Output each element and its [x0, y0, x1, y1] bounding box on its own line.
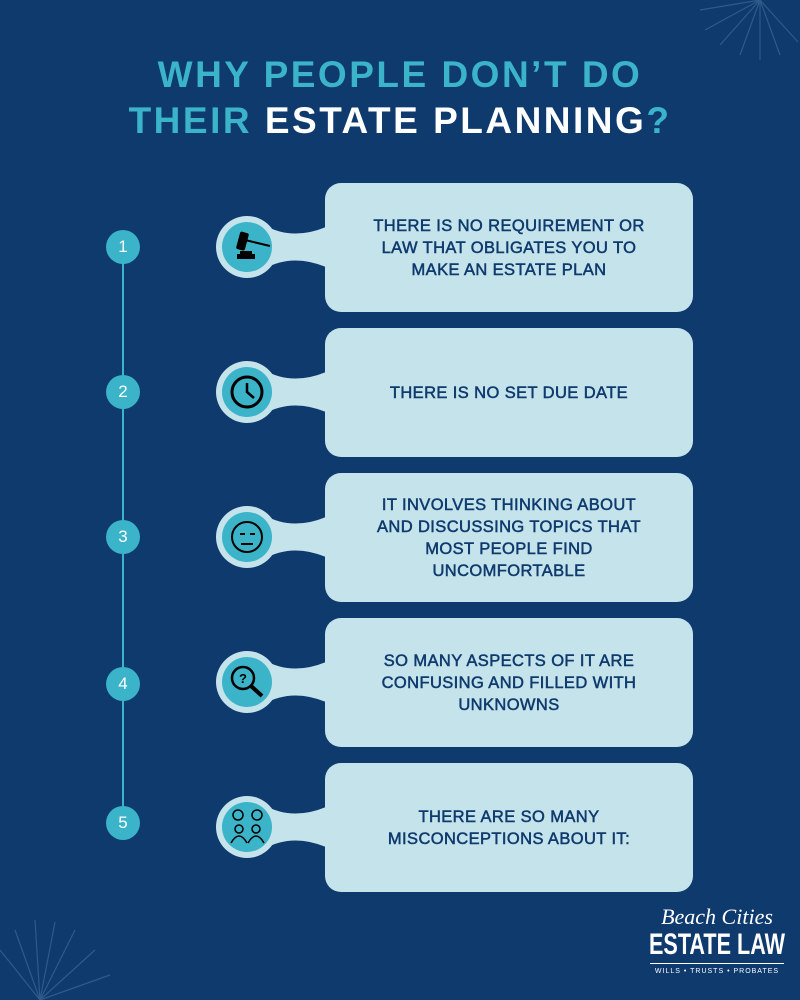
- card 5: THERE ARE SO MANY MISCONCEPTIONS ABOUT IT:: [388, 808, 630, 848]
- item 4: [106, 618, 693, 747]
- card 2: THERE IS NO SET DUE DATE: [390, 384, 628, 402]
- logo: Beach Cities: [661, 904, 773, 929]
- card 4: [325, 618, 693, 747]
- number 5: [106, 806, 140, 840]
- logo: WILLS • TRUSTS • PROBATES: [655, 968, 779, 975]
- card 1: THERE IS NO REQUIREMENT OR LAW THAT OBLIGATES YOU TO MAKE AN ESTATE PLAN: [373, 216, 645, 278]
- number 2: [106, 375, 140, 409]
- title: THEIR ESTATE PLANNING?: [129, 100, 671, 141]
- title: WHY PEOPLE DON’T DO: [158, 54, 642, 95]
- item 1: [106, 183, 693, 312]
- logo: ESTATE LAW: [649, 928, 785, 960]
- item 5: [106, 763, 693, 892]
- number 2: 2: [118, 382, 128, 401]
- number 3: [106, 520, 140, 554]
- icon: magnifier question: ?: [239, 671, 247, 686]
- title: [129, 54, 671, 141]
- card 1: [325, 183, 693, 312]
- number 1: [106, 230, 140, 264]
- item 2: [106, 328, 693, 457]
- card 3: IT INVOLVES THINKING ABOUT AND DISCUSSING TOPICS THAT MOST PEOPLE FIND UNCOMFORTABLE: [377, 496, 641, 580]
- number 4: 4: [118, 674, 128, 693]
- logo: [649, 904, 785, 975]
- number 5: 5: [118, 813, 128, 832]
- card 5: [325, 763, 693, 892]
- card 2: [325, 328, 693, 457]
- number 4: [106, 667, 140, 701]
- number 1: 1: [118, 237, 128, 256]
- item 3: [106, 473, 693, 602]
- number 3: 3: [118, 527, 128, 546]
- card 4: SO MANY ASPECTS OF IT ARE CONFUSING AND FILLED WITH UNKNOWNS: [382, 652, 636, 714]
- card 3: [325, 473, 693, 602]
